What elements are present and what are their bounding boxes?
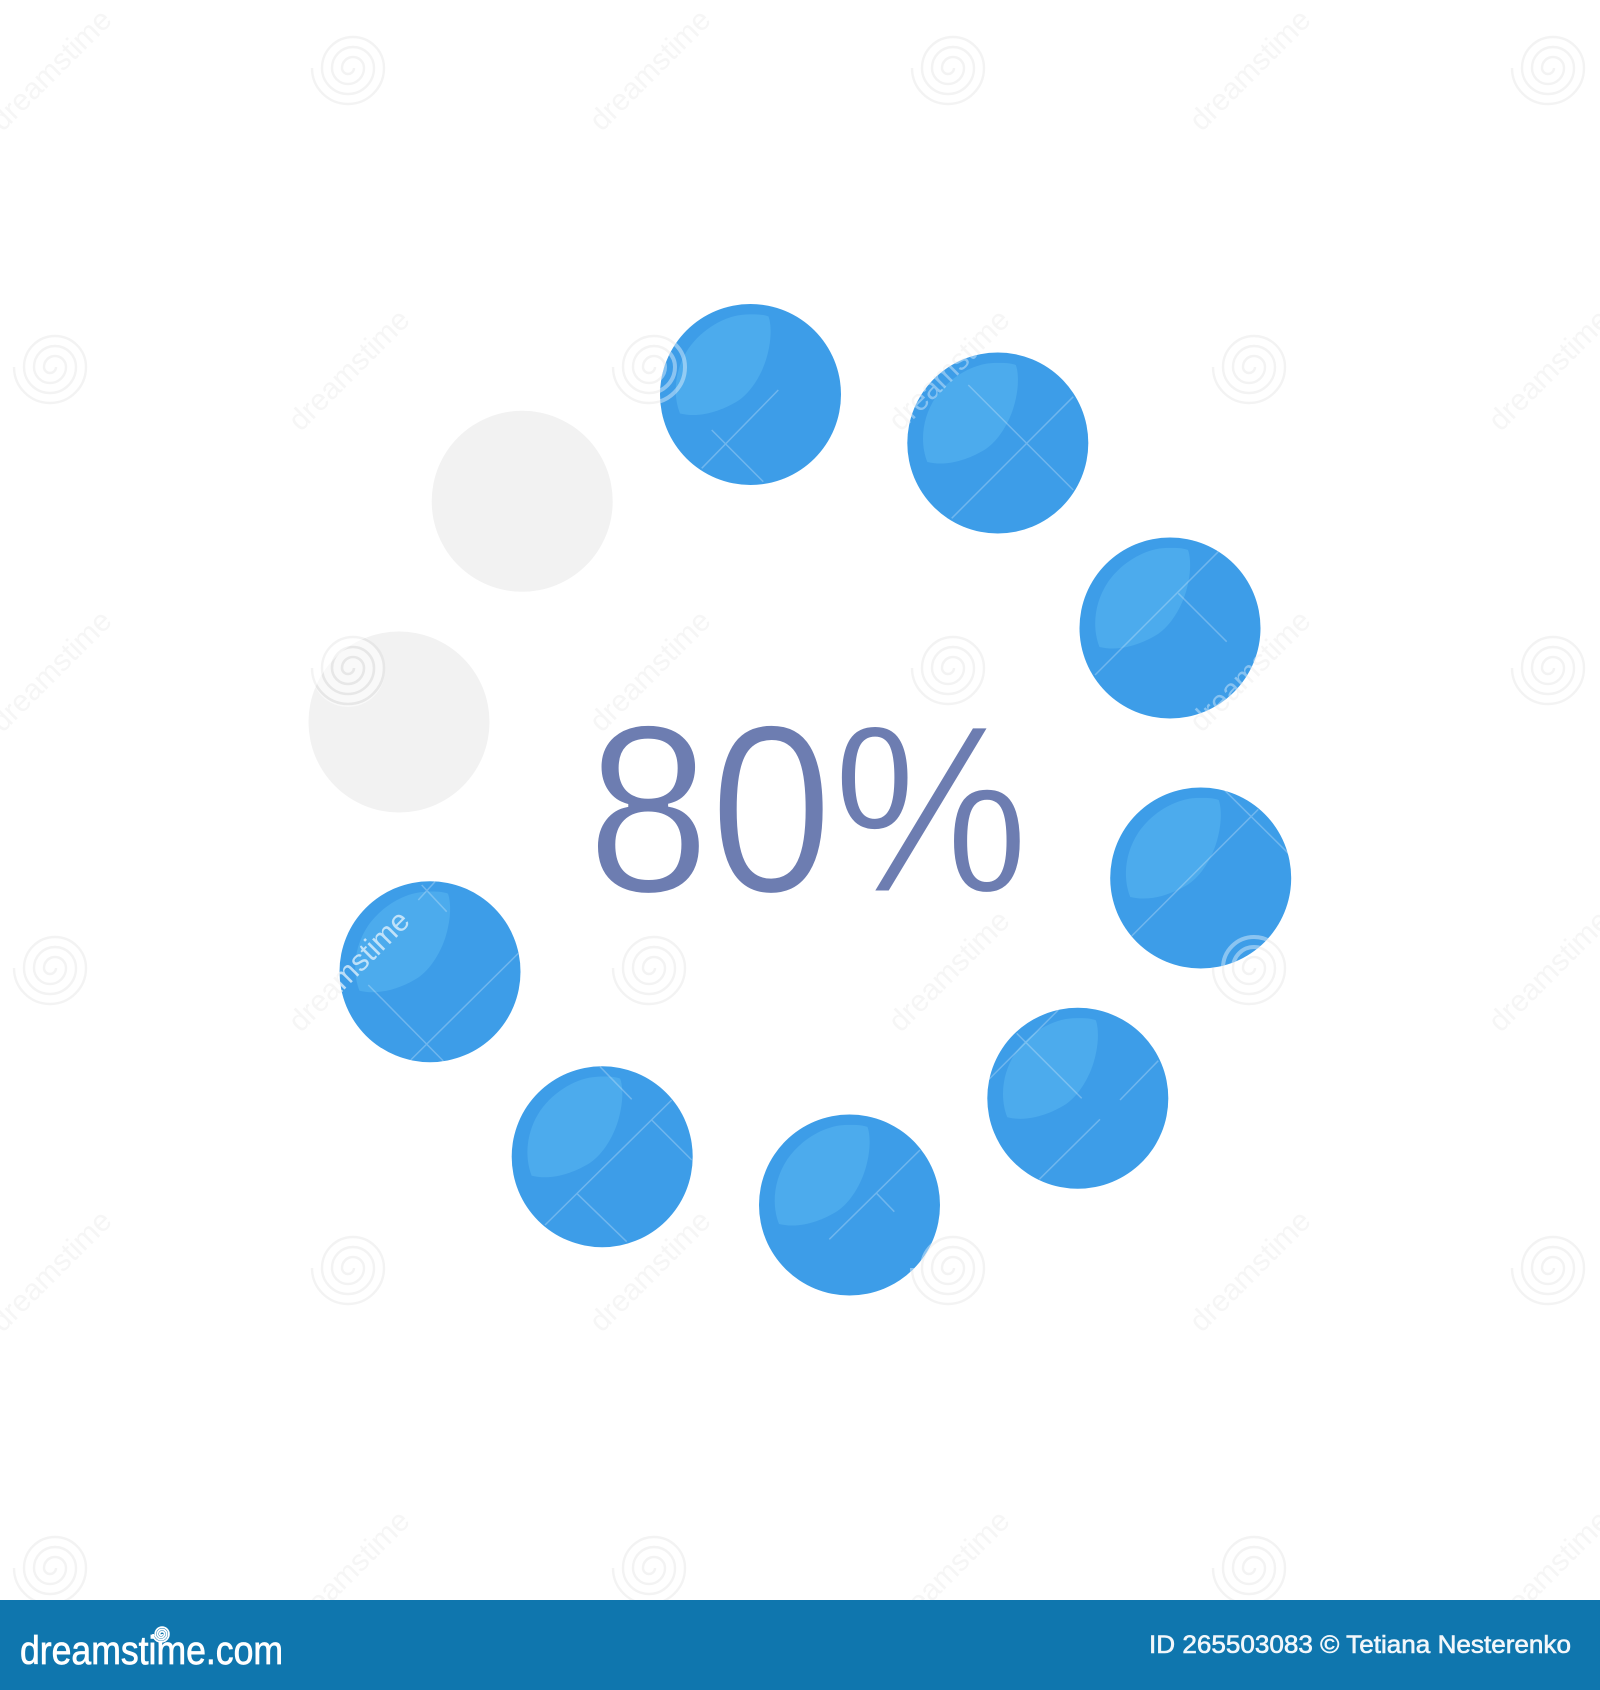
watermark pattern: dreamstime [1183, 1204, 1317, 1338]
dot 2 filled [907, 352, 1088, 534]
footer band [0, 1600, 1600, 1690]
watermark pattern: dreamstime [282, 303, 416, 437]
watermark pattern: dreamstime [282, 904, 416, 1038]
watermark pattern: dreamstime [1183, 604, 1317, 738]
image credit: ID 265503083 © Tetiana Nesterenko [1149, 1631, 1571, 1659]
footer logo: dreamstime.com [20, 1629, 283, 1673]
watermark pattern: dreamstime [882, 1504, 1016, 1638]
watermark pattern: dreamstime [882, 904, 1016, 1038]
dot 7 filled [512, 1066, 693, 1247]
watermark lines and marks over dots: dreamstime [882, 303, 1016, 437]
watermark lines and marks over dots [316, 343, 1288, 1272]
dot 3 filled [1080, 538, 1260, 718]
progress ring: ten dots [308, 304, 1291, 1296]
dot 8 filled [340, 881, 520, 1062]
dot 4 filled [1110, 788, 1291, 968]
watermark pattern: dreamstime [583, 604, 717, 738]
dot 1 filled [660, 304, 841, 485]
watermark pattern: dreamstime [583, 1204, 717, 1338]
dot 5 filled [987, 1008, 1168, 1189]
watermark lines and marks over dots: dreamstime [282, 904, 416, 1038]
logo spiral icon [153, 1627, 169, 1642]
dot 9 empty [308, 632, 490, 812]
watermark pattern: dreamstime [583, 3, 717, 137]
dot 6 filled [759, 1114, 940, 1296]
dot 10 empty [432, 411, 613, 592]
watermark pattern: dreamstime [882, 303, 1016, 437]
watermark pattern: dreamstime [1183, 3, 1317, 137]
watermark pattern: dreamstime [282, 1504, 416, 1638]
percentage label: 80% [587, 675, 1029, 943]
watermark lines and marks over dots: dreamstime [1183, 604, 1317, 738]
